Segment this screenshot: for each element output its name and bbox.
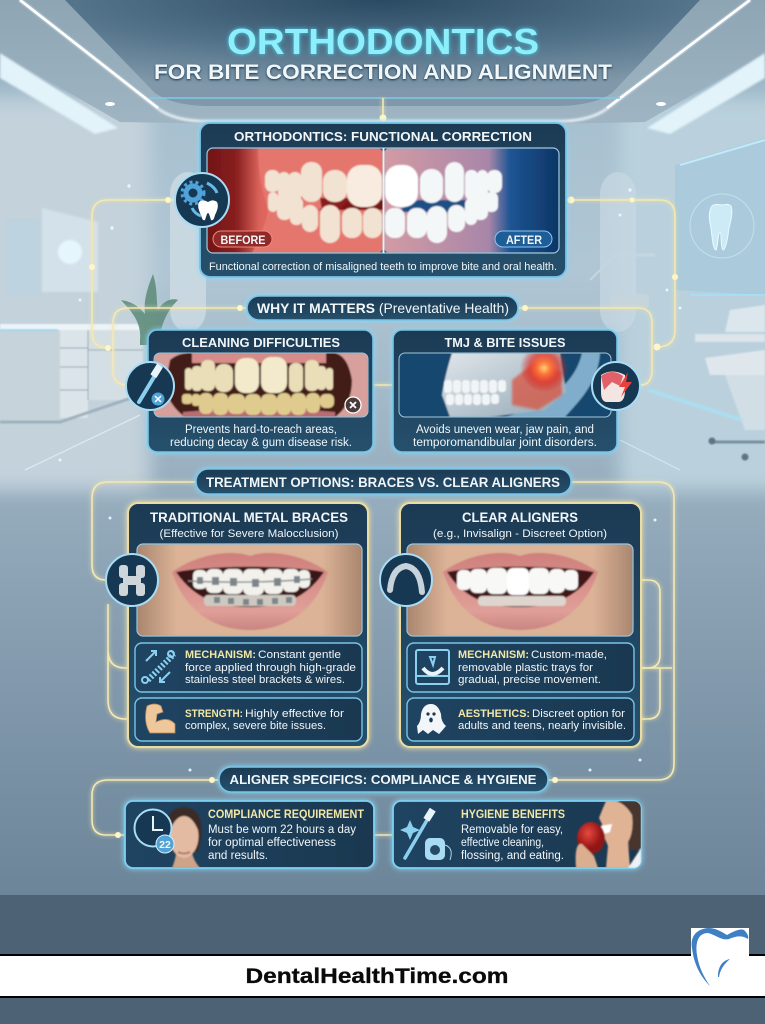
title: ORTHODONTICS — [227, 21, 539, 62]
panel: compliance requirement: for optimal effectiveness — [208, 837, 336, 849]
icon: face with clock: 22 — [159, 839, 171, 851]
panel: hygiene benefits: effective cleaning, — [461, 837, 544, 849]
image: woman with apple — [576, 801, 641, 868]
panel: TMJ and bite issues: temporomandibular joint disorders. — [413, 437, 597, 449]
image: crowded teeth — [154, 353, 368, 417]
label: after — [495, 231, 552, 247]
panel: cleaning difficulties: reducing decay & gum disease risk. — [170, 437, 352, 449]
logo: tooth — [692, 928, 748, 986]
icon: ghost — [417, 704, 446, 734]
icon: aligner tray — [380, 554, 432, 606]
card: aligner mechanism: removable plastic trays for — [458, 662, 593, 674]
image: smile with aligners — [407, 544, 633, 636]
panel: compliance requirement: Must be worn 22 hours a day — [208, 824, 356, 836]
label: before: BEFORE — [220, 235, 266, 247]
image: smile with braces — [137, 544, 362, 636]
text: compliance: COMPLIANCE REQUIREMENT — [208, 809, 364, 821]
card: aligner mechanism: gradual, precise movement. — [458, 674, 601, 686]
title: FOR BITE CORRECTION AND ALIGNMENT — [154, 61, 612, 84]
icon: x mark — [345, 397, 361, 413]
icon: flexed arm — [146, 704, 175, 733]
subheading: clear aligners: (e.g., Invisalign - Discreet Option) — [433, 528, 607, 540]
heading: metal braces: TRADITIONAL METAL BRACES — [150, 510, 348, 525]
footer text: DentalHealthTime.com — [246, 965, 508, 988]
icon: worn tooth with lightning — [592, 362, 640, 410]
image: before teeth — [207, 148, 383, 253]
image: jaw skull — [400, 354, 610, 416]
heading: TMJ: TMJ & BITE ISSUES — [444, 335, 566, 350]
title — [154, 21, 612, 85]
caption: cleaning: Prevents hard-to-reach areas, — [185, 424, 337, 436]
card: braces strength — [135, 698, 362, 741]
card: braces mechanism: Constant gentle — [258, 649, 341, 661]
text: aesthetics: AESTHETICS: — [458, 708, 530, 720]
panel: clear aligners — [400, 503, 641, 747]
title: FOR BITE CORRECTION AND ALIGNMENT — [154, 62, 612, 85]
text: aligner mechanism: MECHANISM: — [458, 649, 529, 661]
heading: treatment options — [196, 469, 571, 494]
text: strength: STRENGTH: — [185, 708, 243, 720]
card: aligner aesthetics: adults and teens, nearly invisible. — [458, 720, 626, 732]
image: after teeth — [384, 148, 559, 253]
card: braces mechanism: force applied through high-grade — [185, 662, 356, 674]
card: braces mechanism — [135, 643, 362, 692]
label: after: AFTER — [506, 235, 543, 247]
heading: functional correction: ORTHODONTICS: FUNCTIONAL CORRECTION — [234, 129, 532, 144]
icon: bracket — [106, 554, 158, 606]
heading: clear aligners: CLEAR ALIGNERS — [462, 510, 578, 525]
panel: traditional metal braces — [128, 503, 368, 747]
panel: hygiene benefits: flossing, and eating. — [461, 850, 564, 862]
panel: TMJ and bite issues — [393, 330, 617, 452]
icon: face with clock — [134, 807, 201, 868]
title: ORTHODONTICS — [227, 21, 539, 62]
heading: aligner specifics — [219, 767, 548, 792]
caption: functional correction: Functional correction of misaligned teeth to improve bite and oral health. — [209, 261, 557, 273]
heading: aligner specifics: ALIGNER SPECIFICS: COMPLIANCE & HYGIENE — [230, 772, 537, 787]
subheading: metal braces: (Effective for Severe Malocclusion) — [160, 528, 338, 540]
text: braces mechanism: MECHANISM: — [185, 649, 256, 661]
heading: treatment options: TREATMENT OPTIONS: BRACES VS. CLEAR ALIGNERS — [206, 475, 560, 490]
heading: cleaning difficulties: CLEANING DIFFICULTIES — [182, 335, 340, 350]
panel: cleaning difficulties — [148, 330, 373, 452]
card: aligner mechanism — [407, 643, 634, 692]
card: aligner aesthetics — [407, 698, 634, 741]
icon: 3d printer — [416, 650, 449, 684]
panel: compliance requirement — [125, 801, 374, 868]
icon: gears and tooth — [175, 173, 229, 227]
caption: TMJ: Avoids uneven wear, jaw pain, and — [416, 424, 594, 436]
connector lines — [58, 98, 682, 838]
panel: functional correction — [200, 123, 566, 277]
text: hygiene: HYGIENE BENEFITS — [461, 809, 565, 821]
card: braces strength: complex, severe bite issues. — [185, 720, 326, 732]
panel: hygiene benefits — [393, 801, 641, 868]
card: aligner aesthetics: Discreet option for — [532, 708, 625, 720]
panel: compliance requirement: and results. — [208, 850, 268, 862]
icon: toothbrush with x — [126, 362, 174, 410]
heading: why it matters — [247, 296, 518, 320]
icon: spring — [142, 651, 174, 683]
label: before — [213, 231, 272, 247]
card: braces mechanism: stainless steel brackets & wires. — [185, 674, 345, 686]
card: braces strength: Highly effective for — [245, 708, 344, 720]
footer band — [0, 928, 765, 998]
heading: why it matters: WHY IT MATTERS (Preventative Health) — [257, 300, 509, 316]
icon: toothbrush and floss — [400, 808, 451, 860]
card: aligner mechanism: Custom-made, — [531, 649, 607, 661]
panel: hygiene benefits: Removable for easy, — [461, 824, 563, 836]
